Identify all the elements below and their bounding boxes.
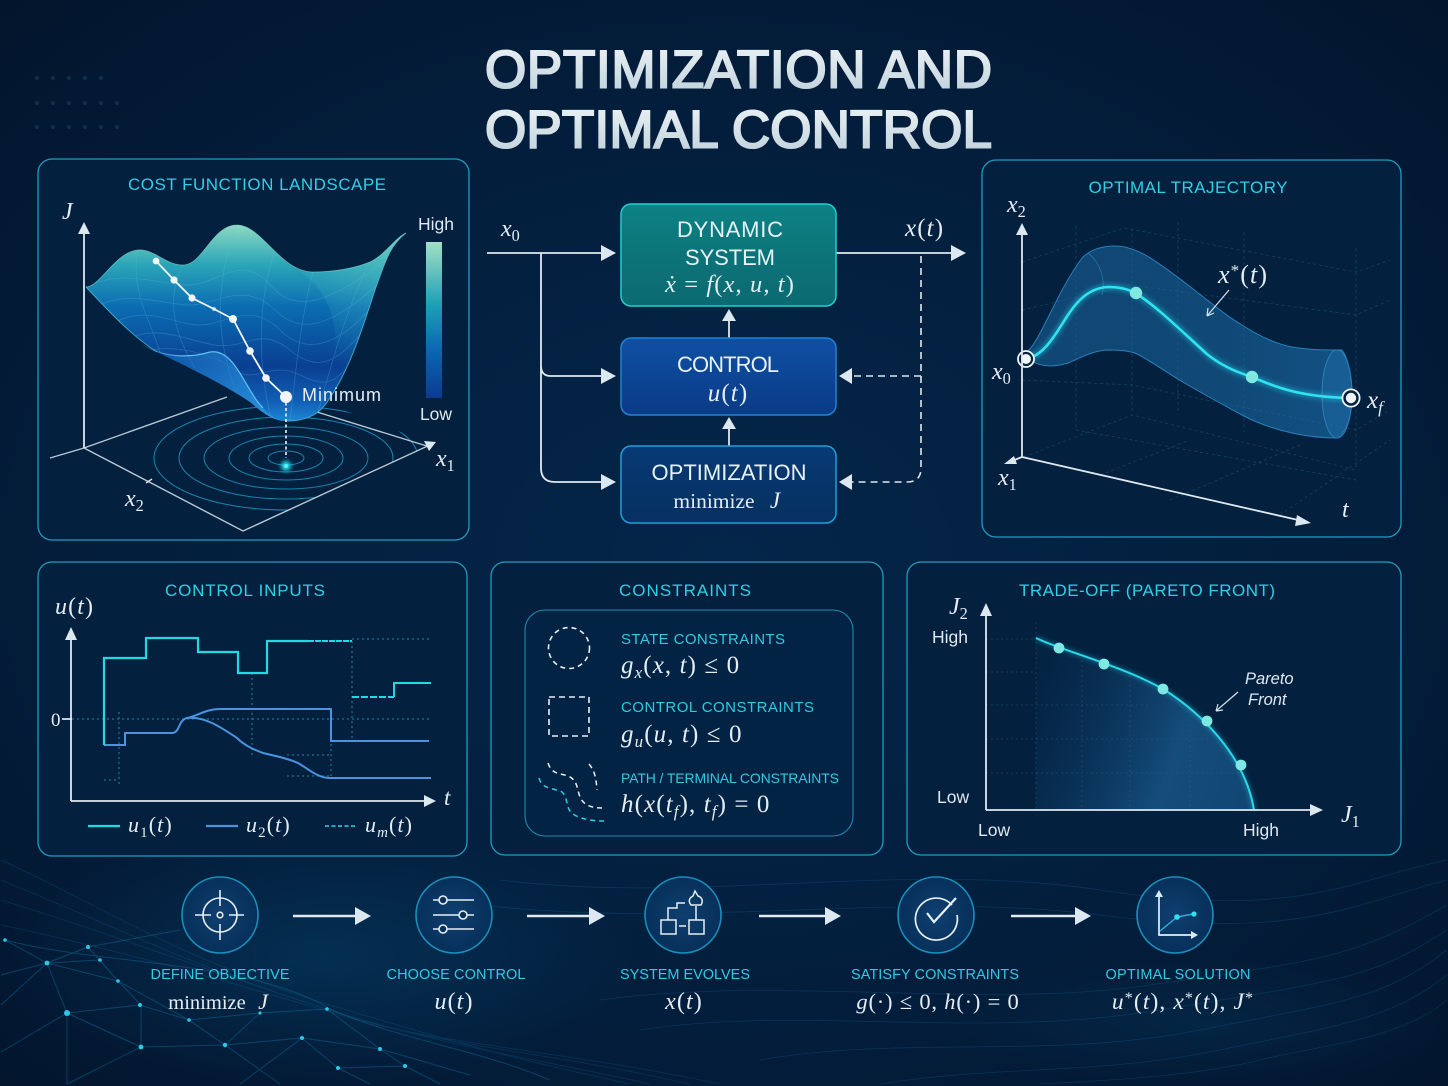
trajectory annotations: 2 [1018,202,1026,221]
path / terminal constraints row: ), [680,791,704,818]
inner card [525,610,853,836]
box: control [621,338,836,415]
step: choose control [386,877,526,1015]
heading: constraints: CONSTRAINTS [619,581,751,600]
legend: ( [267,812,275,837]
box: dynamic system: DYNAMIC [677,217,783,242]
title: OPTIMAL CONTROL [485,100,992,160]
signal lines [487,245,966,490]
trajectory annotations: ( [1240,260,1250,289]
box: optimization: J [770,488,782,513]
step: system evolves: SYSTEM EVOLVES [620,967,750,983]
legend: u [246,812,258,837]
panel: optimal trajectory [982,160,1401,537]
arrow [759,907,841,925]
trajectory annotations: 0 [1003,369,1011,388]
colour scale [418,214,454,424]
step: define objective [150,877,290,1014]
panel: cost function landscape [38,159,469,540]
axes [51,594,451,810]
trajectory tube [1027,246,1352,438]
pareto front label: Front [1248,691,1288,709]
trajectory annotations: t) [1250,260,1268,289]
step: system evolves: x(t) [664,989,703,1015]
legend: m [377,825,389,841]
step: optimal solution: ( [1194,989,1203,1015]
legend: ( [149,812,157,837]
panel: control inputs [38,562,467,856]
axis labels: x [436,446,447,472]
control constraints row: g [621,721,635,748]
title [485,40,992,160]
box: dynamic system: ẋ = f(x, u, t) [664,271,795,298]
step: choose control: u(t) [434,989,474,1015]
heading: control inputs: CONTROL INPUTS [165,581,325,600]
title: OPTIMIZATION AND [485,40,992,100]
path / terminal constraints row: f [712,802,719,821]
step: optimal solution: t), J [1203,989,1245,1015]
arrow [527,907,605,925]
path / terminal constraints row: t [704,791,712,818]
control constraints row: ( [644,721,654,748]
optimal trajectory curve [1018,287,1360,407]
pareto front chart [986,622,1254,810]
axes: t [444,785,451,810]
box: dynamic system [621,204,836,306]
axes: J [949,594,960,620]
legend: t) [157,812,173,837]
perspective grid [1022,222,1390,515]
heading: trade-off: TRADE-OFF (PARETO FRONT) [1019,581,1275,600]
pareto front label: Pareto [1245,670,1294,688]
colour scale: Low [420,404,452,424]
trajectory annotations: x [1367,387,1378,414]
axes: J [1341,802,1352,828]
legend: ( [389,812,397,837]
path / terminal constraints row: ) = 0 [718,791,771,818]
step: optimal solution [1106,877,1254,1015]
state constraints row: ( [643,652,653,679]
trajectory annotations [991,192,1385,523]
pareto front label [1216,670,1294,711]
legend: t) [275,812,291,837]
trajectory annotations: x [1007,192,1018,218]
axes: Low [937,787,969,807]
state constraints row [548,628,785,682]
control constraints row: CONTROL CONSTRAINTS [621,699,814,716]
step: system evolves [620,877,750,1015]
signal labels: x [501,216,512,242]
step: satisfy constraints [851,877,1020,1014]
heading: optimal trajectory: OPTIMAL TRAJECTORY [1088,178,1288,197]
trajectory annotations: f [1378,398,1385,417]
step: optimal solution: * [1185,990,1194,1007]
control constraints row: u, t) ≤ 0 [654,721,743,748]
trajectory annotations: * [1231,261,1240,280]
descent path to minimum: Minimum [302,385,381,405]
step: satisfy constraints: g(·) ≤ 0, h(·) = 0 [856,989,1020,1014]
box: control: CONTROL [677,352,779,377]
path / terminal constraints row: f [674,802,681,821]
legend: 2 [258,825,267,841]
step: optimal solution: t), x [1143,989,1185,1015]
axes [1004,223,1311,526]
arrow [293,907,371,925]
heading: cost function landscape: COST FUNCTION LANDSCAPE [128,175,386,194]
step: satisfy constraints: SATISFY CONSTRAINTS [851,967,1019,983]
step: define objective: DEFINE OBJECTIVE [150,967,290,983]
signal labels: x(t) [904,215,944,242]
process flow [150,877,1254,1015]
axes: 0 [51,710,60,731]
legend: t) [397,812,413,837]
axis labels: x [125,486,136,512]
trajectory annotations: 1 [1009,475,1017,494]
step: optimal solution: u [1112,989,1125,1015]
axes: 2 [960,604,968,623]
step: define objective: J [258,989,269,1014]
state constraints row: x, t) ≤ 0 [653,652,740,679]
step: optimal solution: * [1245,990,1254,1007]
axes: 1 [1352,812,1360,831]
box: optimization: OPTIMIZATION [652,460,806,485]
base plane and contours [50,222,436,531]
colour scale: High [418,214,454,234]
step: optimal solution: OPTIMAL SOLUTION [1106,967,1250,983]
signal labels: 0 [512,226,520,245]
step: optimal solution: ( [1134,989,1143,1015]
box: dynamic system: SYSTEM [685,245,775,270]
control constraints row: u [635,732,644,751]
trajectory annotations: x [1217,260,1231,289]
step: define objective: minimize [168,992,246,1014]
step chart [72,638,431,785]
panel: pareto front [907,562,1401,855]
signal labels [500,215,944,245]
legend [88,812,413,841]
axis labels [62,199,455,515]
trajectory annotations: x [998,465,1009,491]
step: optimal solution: * [1125,990,1134,1007]
box: optimization [621,446,836,523]
3D cost surface [86,225,406,421]
block diagram [487,204,966,523]
panel: constraints [491,562,883,855]
step: choose control: CHOOSE CONTROL [386,967,526,983]
path / terminal constraints row: h(x(t [621,791,674,818]
trajectory annotations: x [992,359,1003,385]
axis labels: 1 [447,456,455,475]
legend: u [128,812,140,837]
descent path to minimum [153,258,381,471]
path / terminal constraints row [539,763,839,821]
box: control: u(t) [708,380,748,407]
axis labels: J [62,199,74,225]
axes: Low [978,820,1010,840]
arrow [1011,907,1091,925]
axes: u(t) [55,594,94,620]
axis labels: 2 [136,496,144,515]
path / terminal constraints row: PATH / TERMINAL CONSTRAINTS [621,770,839,786]
axes [932,594,1360,840]
legend: u [365,812,377,837]
box: optimization: minimize [673,489,755,513]
trajectory annotations: t [1342,497,1350,523]
state constraints row: x [634,663,643,682]
state constraints row: g [621,652,635,679]
legend: 1 [140,825,149,841]
control constraints row [549,697,814,751]
state constraints row: STATE CONSTRAINTS [621,631,785,648]
axes: High [932,627,968,647]
axes: High [1243,820,1279,840]
